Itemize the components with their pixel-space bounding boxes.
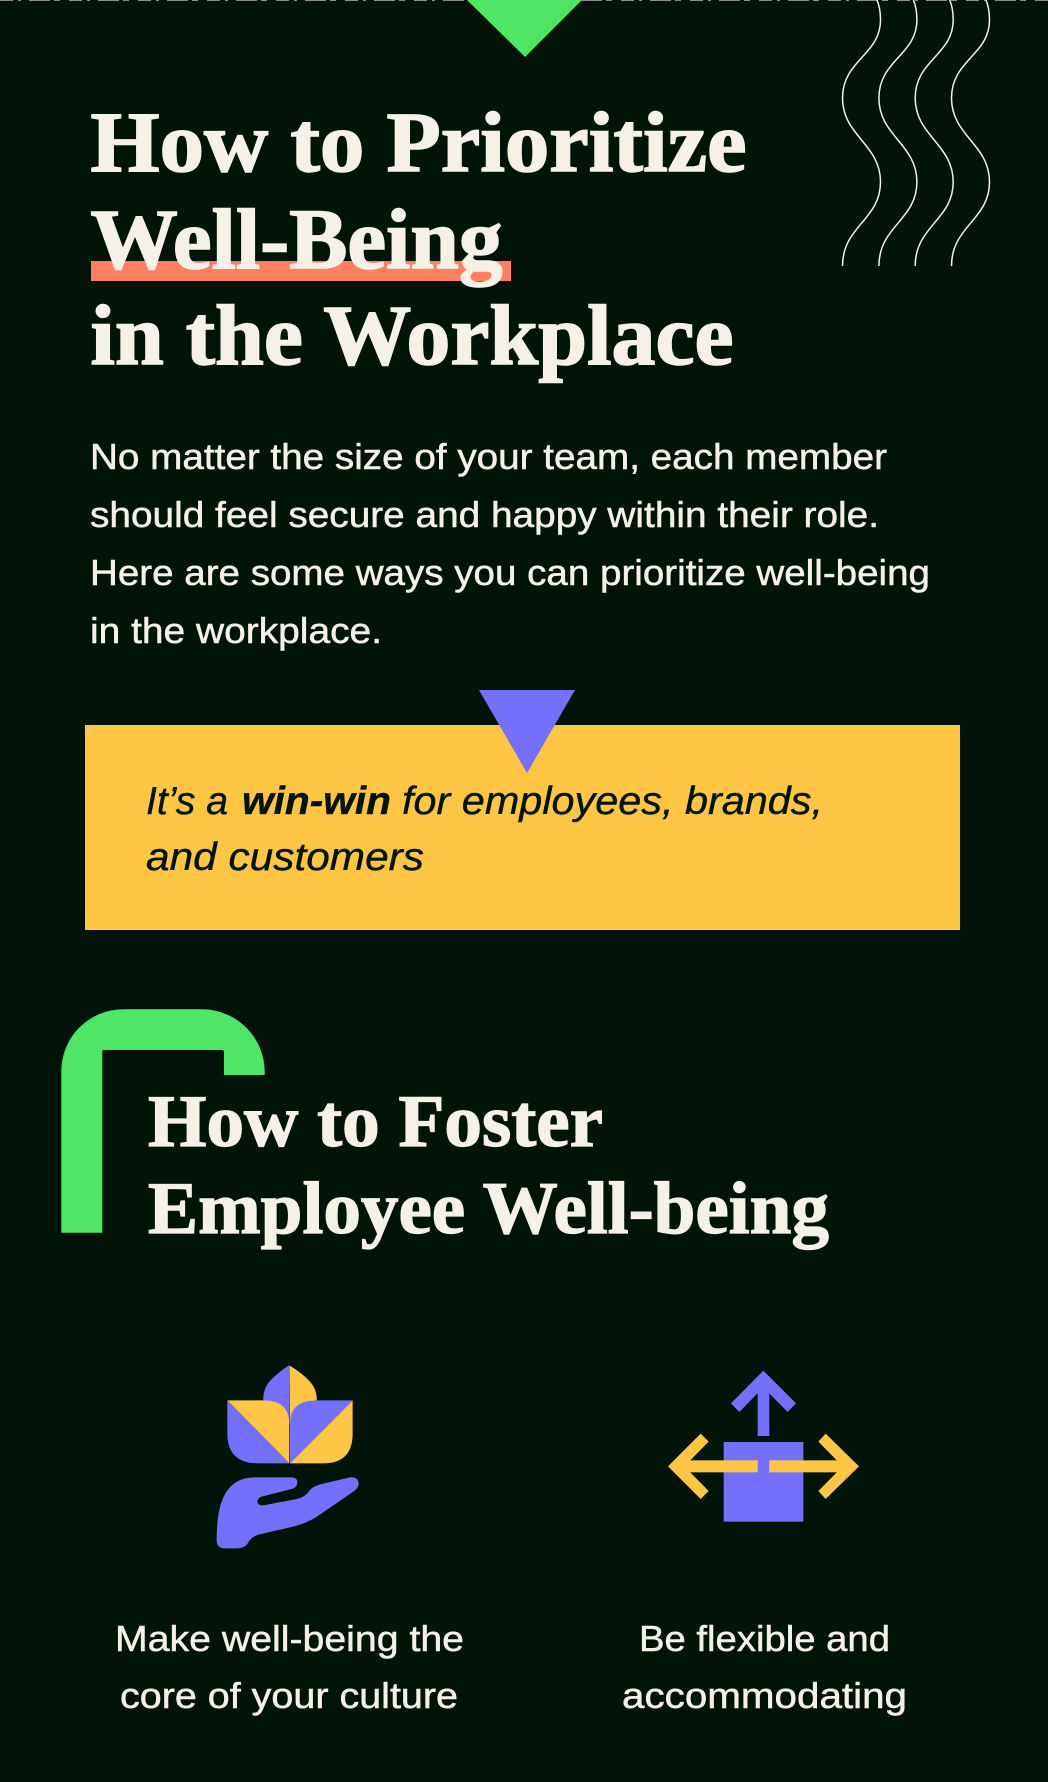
- section heading: [148, 1081, 829, 1250]
- intro paragraph: Here are some ways you can prioritize well-being: [90, 552, 930, 593]
- title line 1: How to Prioritize: [90, 94, 746, 190]
- section heading: Employee Well-being: [148, 1168, 829, 1250]
- title line 3: in the Workplace: [90, 287, 734, 383]
- green bracket: [61, 1009, 265, 1233]
- intro paragraph: No matter the size of your team, each member: [90, 436, 887, 477]
- caption: well-being core: core of your culture: [120, 1675, 458, 1716]
- intro paragraph: should feel secure and happy within their role.: [90, 494, 879, 535]
- caption: well-being core: [115, 1618, 464, 1716]
- icon: green triangle: [467, 0, 582, 57]
- intro paragraph: [90, 436, 930, 651]
- caption: flexible: [622, 1618, 907, 1716]
- title line 2: Well-Being: [90, 191, 502, 287]
- decorative wavy lines: [842, 0, 990, 266]
- callout text: and customers: [146, 836, 424, 879]
- caption: flexible: accommodating: [622, 1675, 907, 1716]
- callout background: [85, 725, 960, 930]
- callout text: It’s a: [146, 780, 228, 823]
- callout text: [146, 780, 823, 879]
- title highlight underline: [91, 261, 511, 281]
- icon: flower in hand: [217, 1365, 359, 1548]
- caption: well-being core: Make well-being the: [115, 1618, 464, 1659]
- caption: flexible: Be flexible and: [639, 1618, 890, 1659]
- icon: box with arrows: [668, 1371, 859, 1522]
- callout text: win-win: [242, 780, 391, 823]
- section heading: How to Foster: [148, 1081, 603, 1163]
- icon: purple triangle: [479, 690, 575, 773]
- intro paragraph: in the workplace.: [90, 610, 382, 651]
- title: [90, 94, 746, 383]
- callout panel: [85, 690, 960, 930]
- callout text: for employees, brands,: [402, 780, 823, 823]
